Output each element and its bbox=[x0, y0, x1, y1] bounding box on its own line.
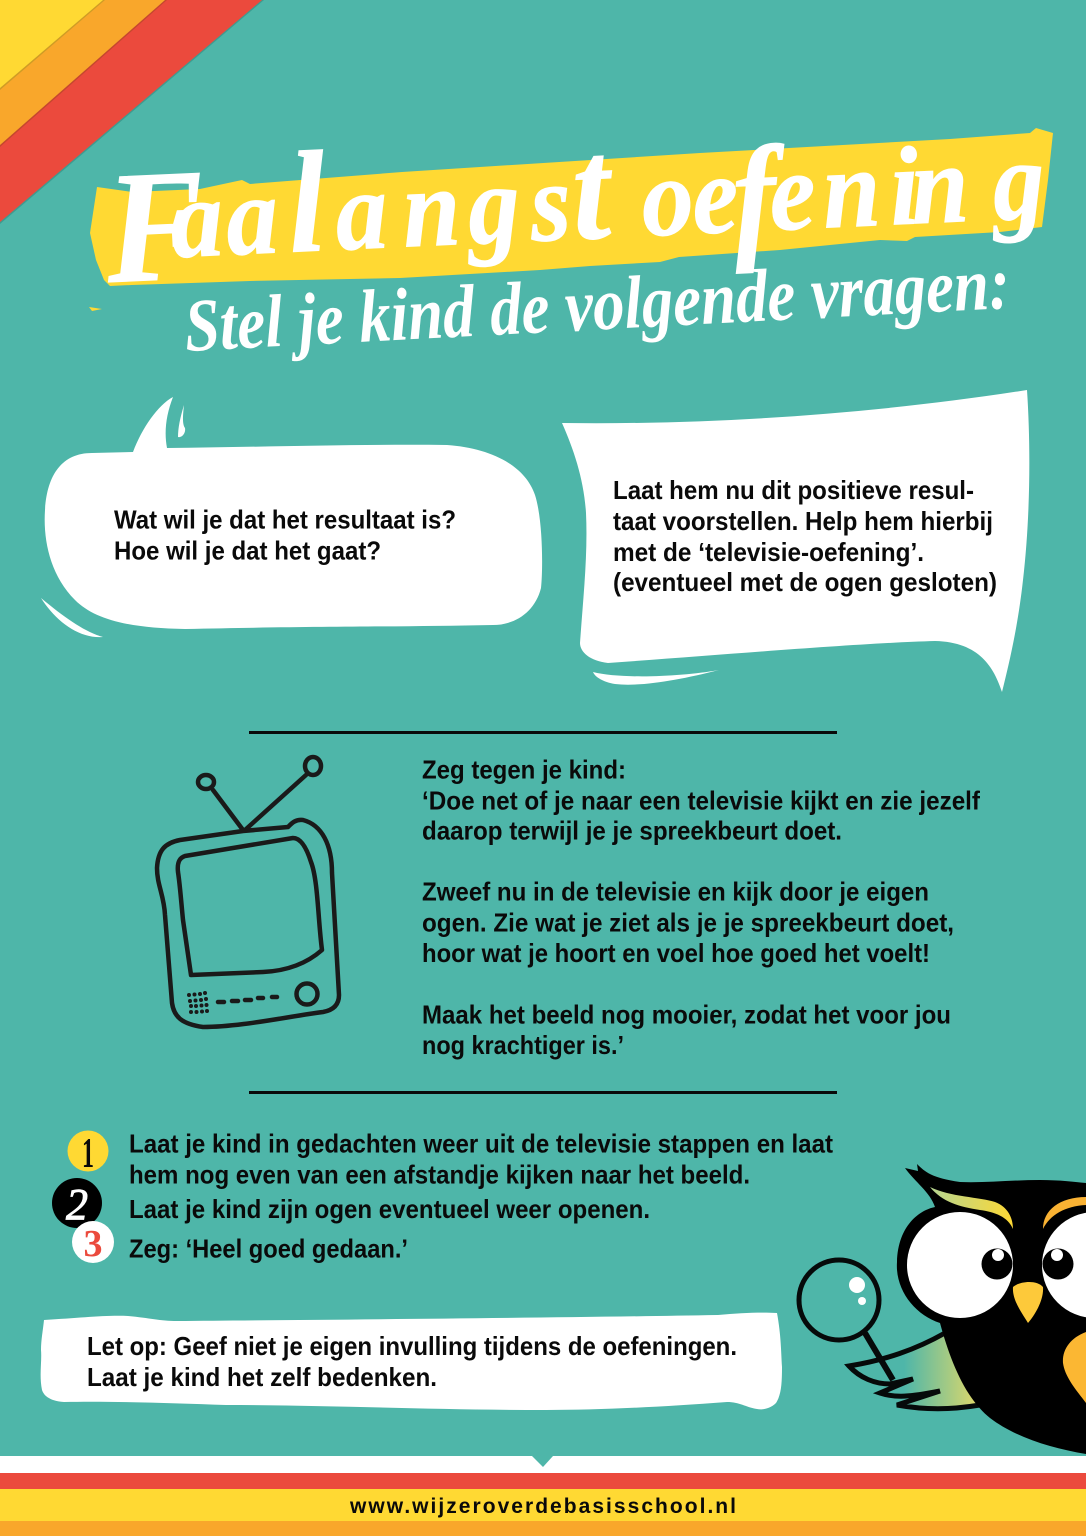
title: l bbox=[285, 122, 329, 284]
numbered badge 1 bbox=[68, 1130, 108, 1177]
instruction text: nog krachtiger is.’ bbox=[422, 1030, 624, 1060]
instruction text: hoor wat je hoort en voel hoe goed het voelt! bbox=[422, 938, 930, 968]
numbered badge 3 bbox=[72, 1221, 114, 1265]
magnifying glass bbox=[799, 1260, 879, 1340]
eyes bbox=[907, 1212, 1013, 1318]
bubble text: met de ‘televisie-oefening’. bbox=[613, 537, 924, 567]
title brush background bbox=[90, 128, 1053, 286]
title: t bbox=[569, 109, 617, 271]
instruction text: Zweef nu in de televisie en kijk door je eigen bbox=[422, 876, 929, 906]
accent: tail bbox=[178, 405, 185, 437]
brows bbox=[930, 1187, 1013, 1229]
numbered badge 2 bbox=[52, 1178, 102, 1229]
mascot: owl with magnifying glass bbox=[799, 1164, 1086, 1454]
accent: swoosh bbox=[593, 670, 719, 685]
bubble text bbox=[613, 475, 997, 597]
body bbox=[897, 1164, 1086, 1454]
instruction text: Maak het beeld nog mooier, zodat het voor jou bbox=[422, 1000, 951, 1030]
bubble text: Laat hem nu dit positieve resul- bbox=[613, 475, 974, 505]
instruction text: ‘Doe net of je naar een televisie kijkt en zie jezelf bbox=[422, 786, 980, 816]
numbered badge 1: 1 bbox=[82, 1131, 94, 1177]
step list: hem nog even van een afstandje kijken naar het beeld. bbox=[129, 1160, 750, 1190]
title: oe bbox=[615, 133, 741, 262]
instruction text: Zeg tegen je kind: bbox=[422, 754, 626, 784]
numbered badge 3: 3 bbox=[84, 1223, 102, 1265]
footer band bbox=[0, 1456, 1086, 1536]
step list bbox=[129, 1128, 833, 1264]
speech bubble: left bbox=[41, 397, 542, 637]
title: angs bbox=[333, 140, 573, 275]
bubble text: Hoe wil je dat het gaat? bbox=[114, 536, 381, 566]
bubble text: (eventueel met de ogen gesloten) bbox=[613, 567, 997, 597]
callout: note bbox=[41, 1313, 782, 1410]
step list: Laat je kind in gedachten weer uit de televisie stappen en laat bbox=[129, 1128, 833, 1158]
website url: www.wijzeroverdebasisschool.nl bbox=[349, 1495, 736, 1518]
title: F bbox=[101, 136, 208, 317]
callout: note: Let op: Geef niet je eigen invulling tijdens de oefeningen. bbox=[87, 1331, 737, 1361]
callout: note: Laat je kind het zelf bedenken. bbox=[87, 1362, 437, 1392]
step list: Zeg: ‘Heel goed gedaan.’ bbox=[129, 1234, 408, 1264]
corner stripes bbox=[0, 0, 264, 224]
beak bbox=[1013, 1282, 1043, 1323]
title: ening bbox=[767, 119, 1047, 255]
bubble text: Wat wil je dat het resultaat is? bbox=[114, 504, 456, 534]
instruction text: daarop terwijl je je spreekbeurt doet. bbox=[422, 816, 842, 846]
small brush fleck bbox=[89, 307, 102, 311]
wing bbox=[849, 1333, 980, 1409]
instruction text bbox=[422, 754, 980, 1060]
bubble text: taat voorstellen. Help hem hierbij bbox=[613, 506, 993, 536]
belly bbox=[1063, 1332, 1086, 1403]
title: aa bbox=[168, 154, 281, 282]
title: f bbox=[729, 117, 790, 275]
icon: television bbox=[157, 757, 339, 1027]
numbered badge 2: 2 bbox=[66, 1180, 88, 1229]
bubble text bbox=[114, 504, 456, 566]
step list: Laat je kind zijn ogen eventueel weer openen. bbox=[129, 1194, 650, 1224]
speech bubble: right bbox=[562, 390, 1029, 692]
accent: swoosh bbox=[41, 598, 103, 637]
instruction text: ogen. Zie wat je ziet als je je spreekbeurt doet, bbox=[422, 908, 954, 938]
